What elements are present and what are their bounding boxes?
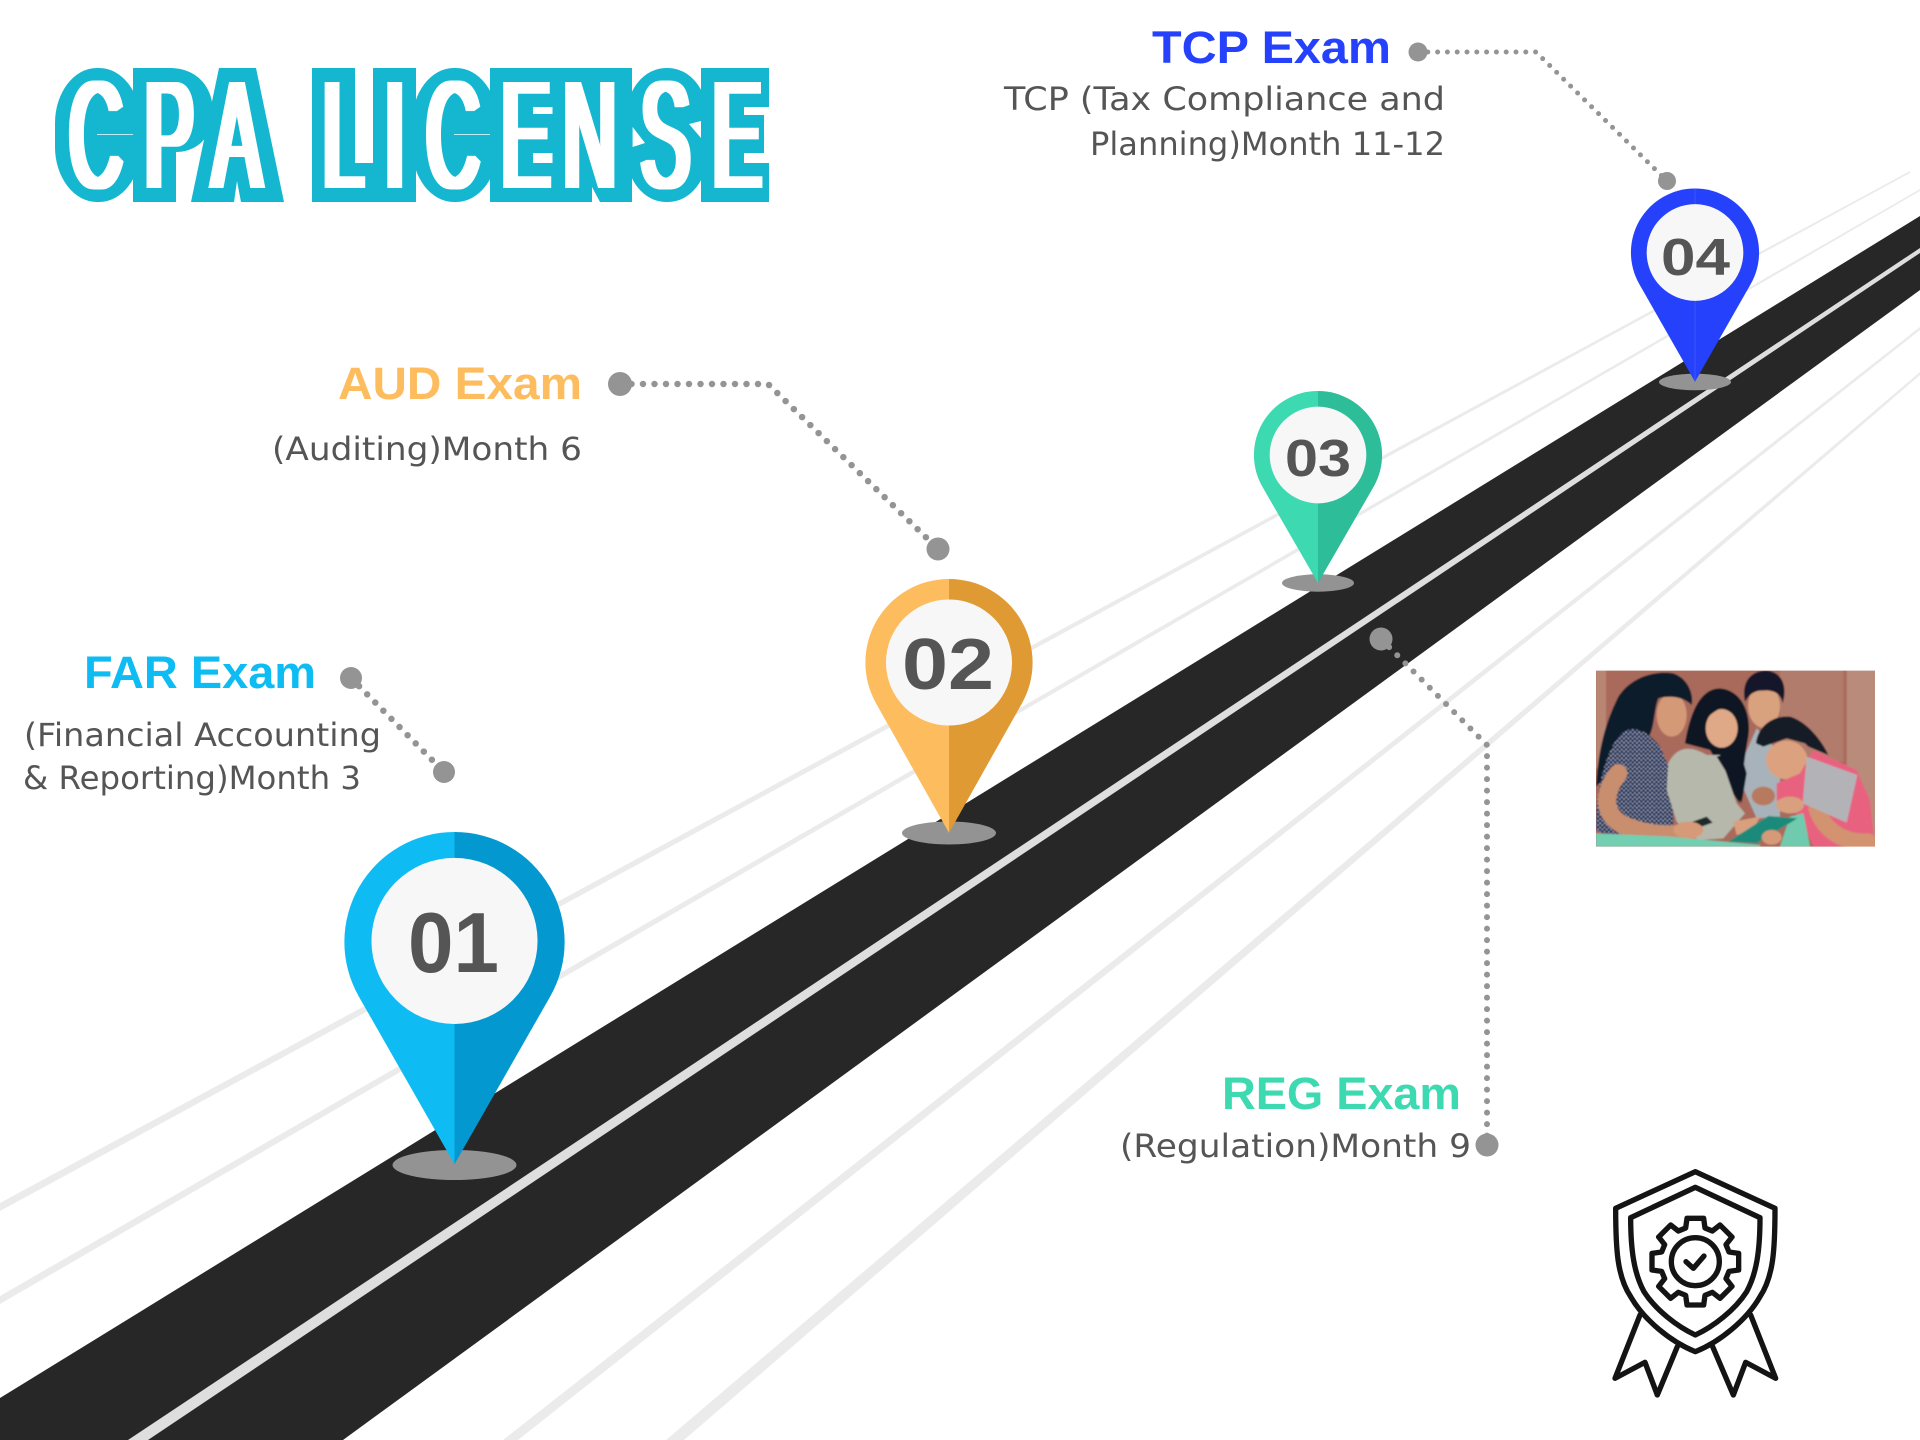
text block: FAR Exam	[23, 647, 381, 797]
photo: students looking at a tablet	[1593, 668, 1880, 848]
text block: REG Exam	[1120, 1068, 1471, 1165]
text block: TCP Exam: TCP (Tax Compliance and	[1003, 80, 1445, 118]
connector: FAR	[340, 667, 455, 783]
connector: AUD	[608, 372, 950, 560]
pin 01	[344, 832, 565, 1180]
girl three	[1766, 741, 1807, 779]
pin 03	[1254, 391, 1382, 592]
text block: REG Exam: REG Exam	[1222, 1068, 1461, 1119]
pin number 02: 02	[902, 625, 994, 705]
girl two	[1685, 688, 1749, 803]
pin number 03: 03	[1285, 430, 1351, 488]
text block: FAR Exam: (Financial Accounting	[24, 716, 381, 754]
text block: REG Exam: (Regulation)Month 9	[1120, 1127, 1471, 1165]
text block: TCP Exam: Planning)Month 11-12	[1090, 125, 1445, 163]
text block: AUD Exam: AUD Exam	[338, 358, 582, 409]
rail and tablet	[1596, 833, 1760, 847]
pin 04	[1631, 188, 1759, 390]
text block: TCP Exam	[1003, 22, 1445, 163]
text block: FAR Exam: & Reporting)Month 3	[23, 759, 361, 797]
text block: AUD Exam	[272, 358, 582, 468]
pin 02	[865, 579, 1033, 844]
road centre line	[128, 248, 1920, 1440]
pin number 04: 04	[1661, 229, 1730, 287]
icon: shield badge with gear and ribbons	[1615, 1172, 1776, 1395]
text block: AUD Exam: (Auditing)Month 6	[272, 430, 582, 468]
pin number 01: 01	[408, 896, 499, 991]
connector: REG	[1370, 628, 1498, 1156]
text block: FAR Exam: FAR Exam	[84, 647, 316, 698]
guy	[1742, 728, 1781, 819]
girl one	[1657, 693, 1687, 737]
title: CPA LICENSE	[69, 49, 762, 221]
text block: TCP Exam: TCP Exam	[1152, 22, 1391, 73]
connector: TCP	[1408, 42, 1676, 190]
